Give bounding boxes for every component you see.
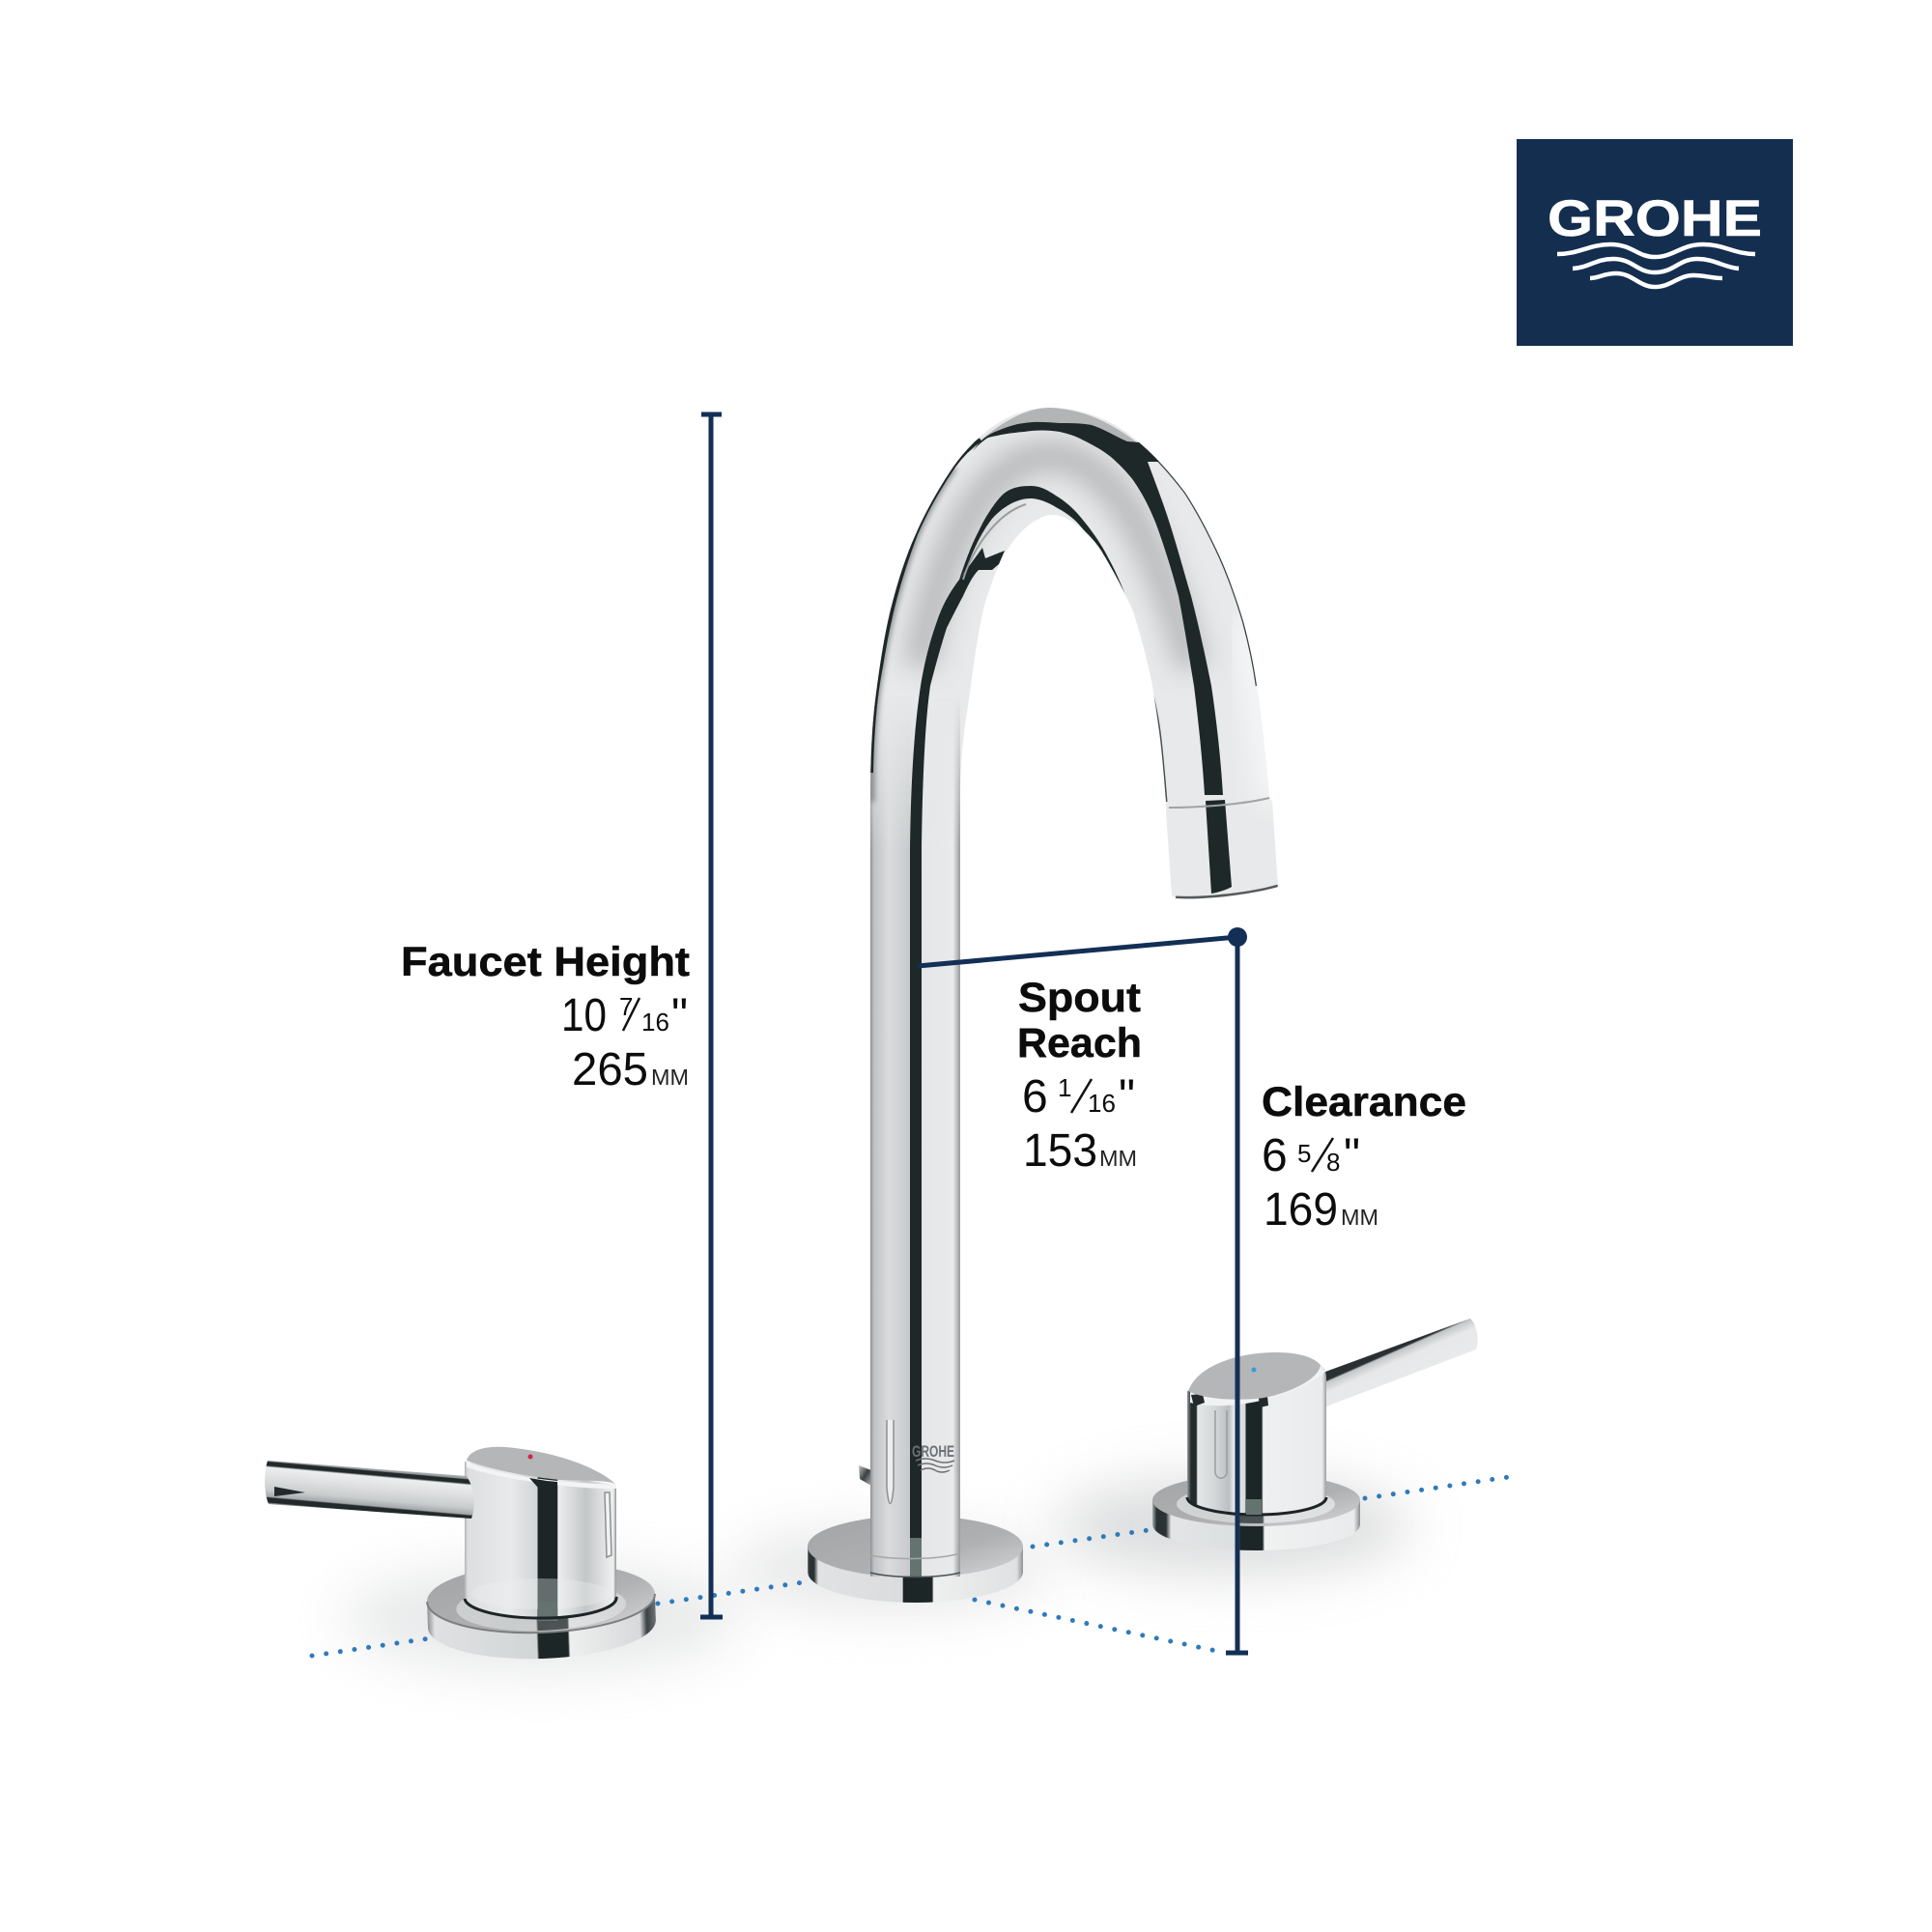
right handle top cap xyxy=(1188,1352,1321,1400)
right handle base disc xyxy=(1152,1474,1360,1550)
label: faucet height: MM xyxy=(651,1065,689,1090)
spout engraved logo xyxy=(912,1442,954,1472)
label: clearance: 8 xyxy=(1326,1148,1340,1177)
icon: logo waves xyxy=(1557,244,1755,287)
label: spout reach: MM xyxy=(1099,1146,1137,1171)
label: clearance: Clearance xyxy=(1262,1079,1466,1125)
label: faucet height: 7 xyxy=(619,992,633,1021)
spout tube xyxy=(860,396,1294,1584)
faucet height dimension line xyxy=(700,413,723,1617)
right handle rim highlight xyxy=(1190,1366,1325,1406)
outer edge thin dark line xyxy=(871,440,980,773)
left handle body xyxy=(465,1462,616,1619)
label: faucet height xyxy=(401,939,690,1095)
icon: red hot marker xyxy=(527,1455,533,1459)
label: clearance: " xyxy=(1344,1130,1360,1181)
left handle rim highlight xyxy=(467,1462,616,1489)
label: spout reach: 1 xyxy=(1058,1073,1071,1102)
icon: centre faucet spout xyxy=(808,396,1294,1603)
drain pull rod xyxy=(858,1465,871,1561)
label: spout reach: Reach xyxy=(1017,1020,1142,1066)
spout reach dimension line xyxy=(918,927,1247,966)
label: clearance xyxy=(1262,1079,1466,1236)
label: faucet height: " xyxy=(671,990,688,1041)
inner arch reflection xyxy=(959,486,1126,595)
base disc front lip xyxy=(870,1573,960,1577)
floor shadows xyxy=(343,1478,1410,1671)
dotted deck alignment lines xyxy=(312,1477,1509,1656)
top rim reflection xyxy=(968,408,1136,453)
label: spout reach: 16 xyxy=(1088,1089,1116,1118)
label: faucet height: 265 xyxy=(572,1044,648,1095)
logo: GROHE xyxy=(1517,139,1793,346)
left handle lever xyxy=(265,1461,474,1519)
outer chrome reflection band xyxy=(973,422,1223,795)
label: clearance: 6 xyxy=(1262,1130,1288,1181)
label: clearance: MM xyxy=(1341,1205,1378,1230)
right handle body xyxy=(1187,1365,1326,1515)
label: faucet height: Faucet Height xyxy=(401,939,690,985)
spout engraved logo: GROHE xyxy=(912,1442,954,1461)
icon: right cold-water handle xyxy=(1152,1319,1478,1550)
clearance dimension line xyxy=(1226,937,1248,1653)
aerator band xyxy=(1206,800,1232,894)
icon: blue cold marker xyxy=(1252,1368,1256,1372)
left handle base disc xyxy=(426,1559,657,1662)
lower pipe lighter reflection xyxy=(910,1538,922,1580)
logo wordmark: GROHE xyxy=(1548,190,1762,247)
label: clearance: 169 xyxy=(1264,1184,1338,1236)
label: faucet height: 16 xyxy=(641,1008,669,1037)
inner chrome reflection band xyxy=(910,548,1005,1580)
right handle lever xyxy=(1325,1319,1478,1406)
label: spout reach: 6 xyxy=(1022,1071,1048,1122)
left handle top cap xyxy=(467,1447,616,1485)
spout base disc xyxy=(808,1516,1023,1603)
infographic canvas xyxy=(265,139,1793,1681)
label: spout reach: " xyxy=(1119,1071,1135,1122)
icon: left hot-water handle xyxy=(265,1447,657,1662)
label: clearance: 5 xyxy=(1297,1139,1311,1168)
label: spout reach xyxy=(1017,975,1142,1177)
label: spout reach: Spout xyxy=(1018,975,1141,1021)
label: spout reach: 153 xyxy=(1023,1125,1097,1177)
label: faucet height: 10 xyxy=(561,990,607,1041)
